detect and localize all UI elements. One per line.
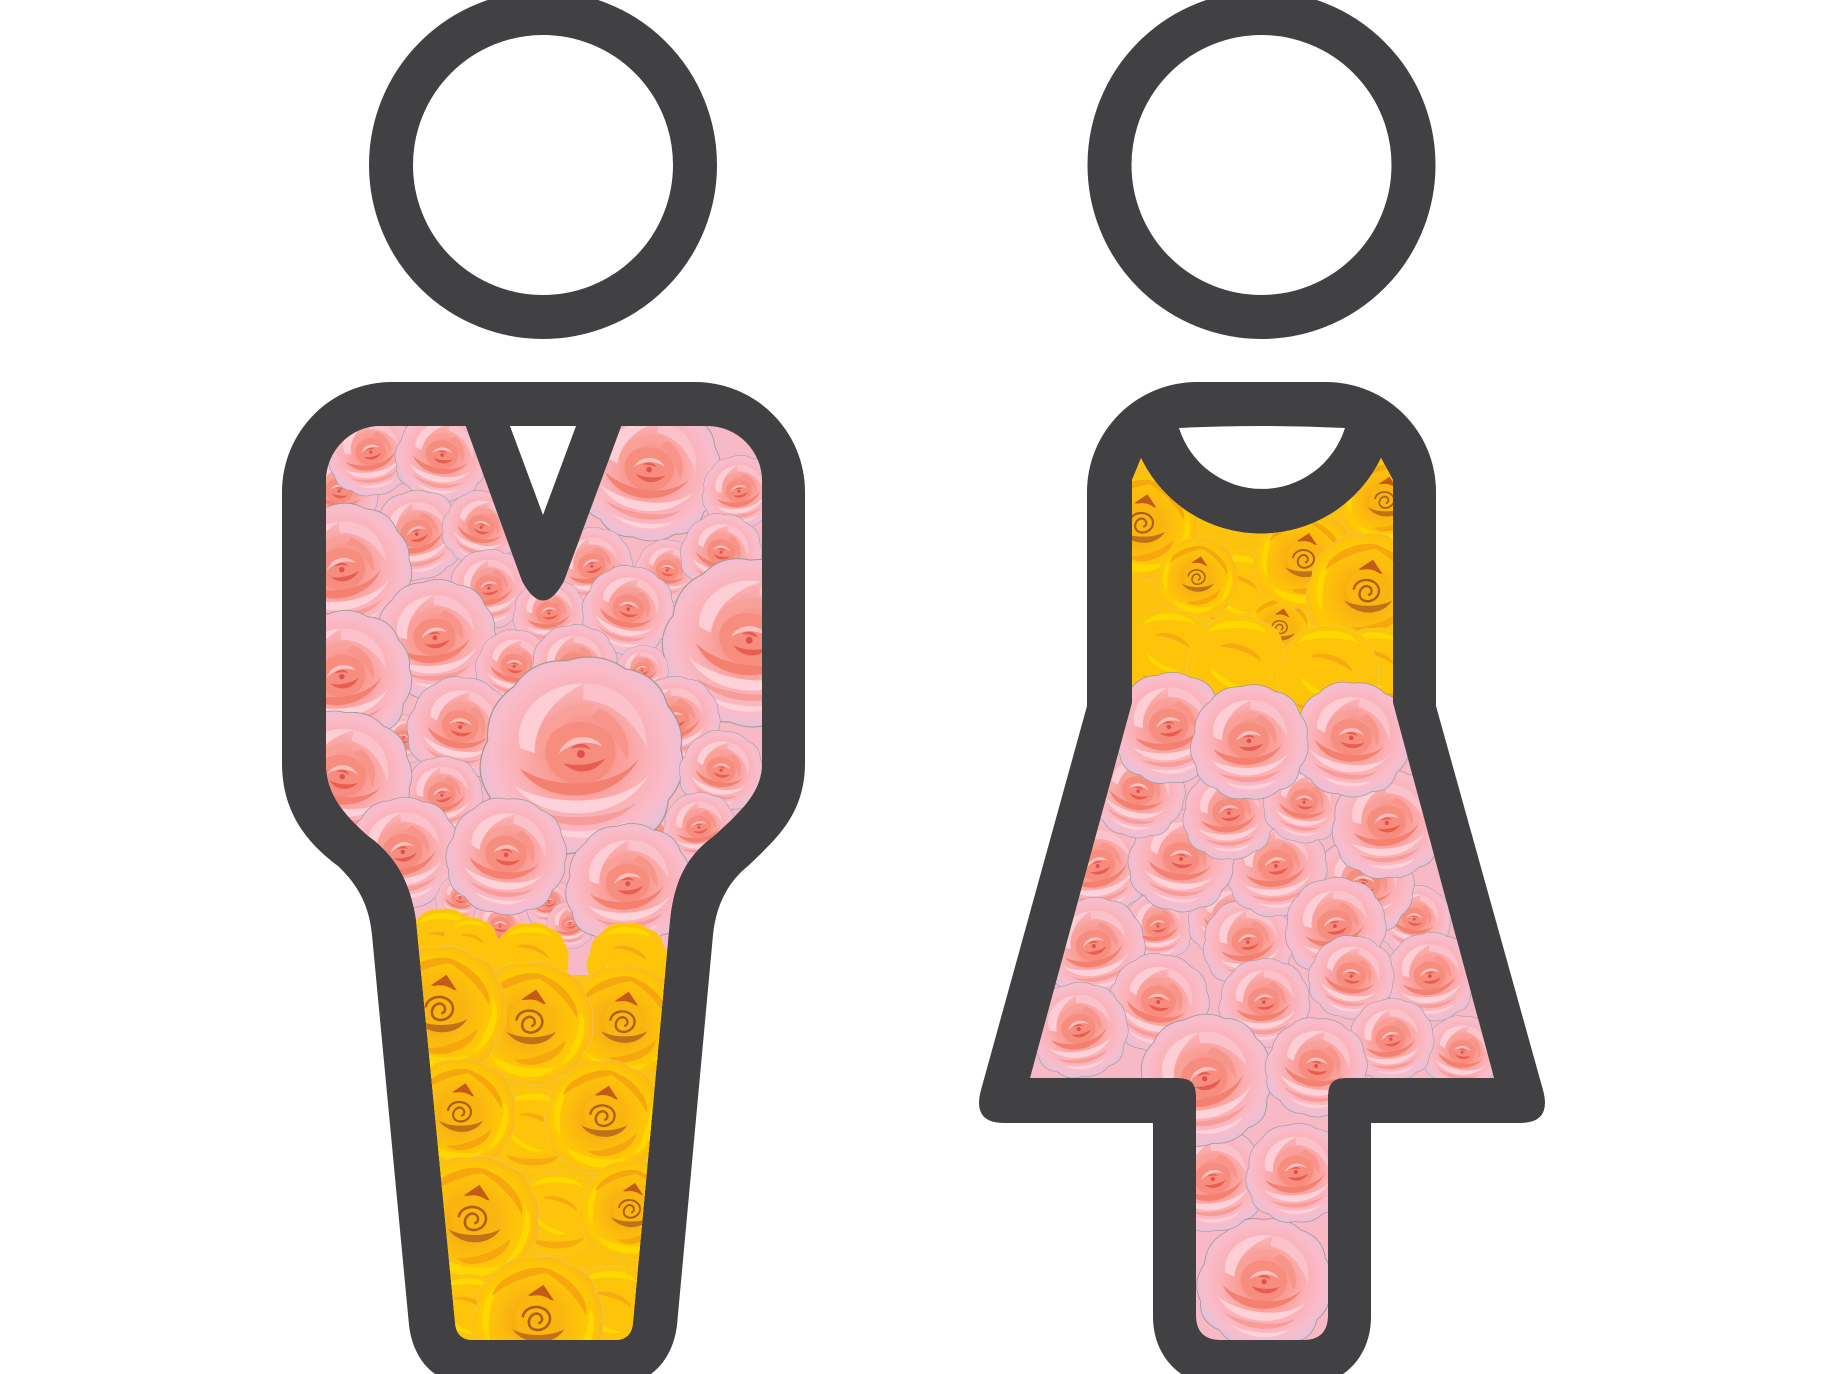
man head ring [391,13,695,317]
yellow roses on woman's bodice [1130,458,1395,714]
man V-neck collar [465,424,622,600]
man body outline [282,382,805,1374]
pink roses on woman's skirt [1022,666,1505,1353]
man white shirt triangle [510,426,576,515]
man body rose fill [326,426,762,1340]
figure: woman [979,13,1545,1374]
woman white neckline [1179,426,1345,489]
woman dress outline [979,382,1545,1374]
woman head ring [1110,13,1414,317]
figure: man [262,13,844,1374]
woman dress rose fill [1022,450,1505,1353]
yellow roses on man's legs [416,908,667,1340]
pink roses on man's torso [326,426,762,950]
